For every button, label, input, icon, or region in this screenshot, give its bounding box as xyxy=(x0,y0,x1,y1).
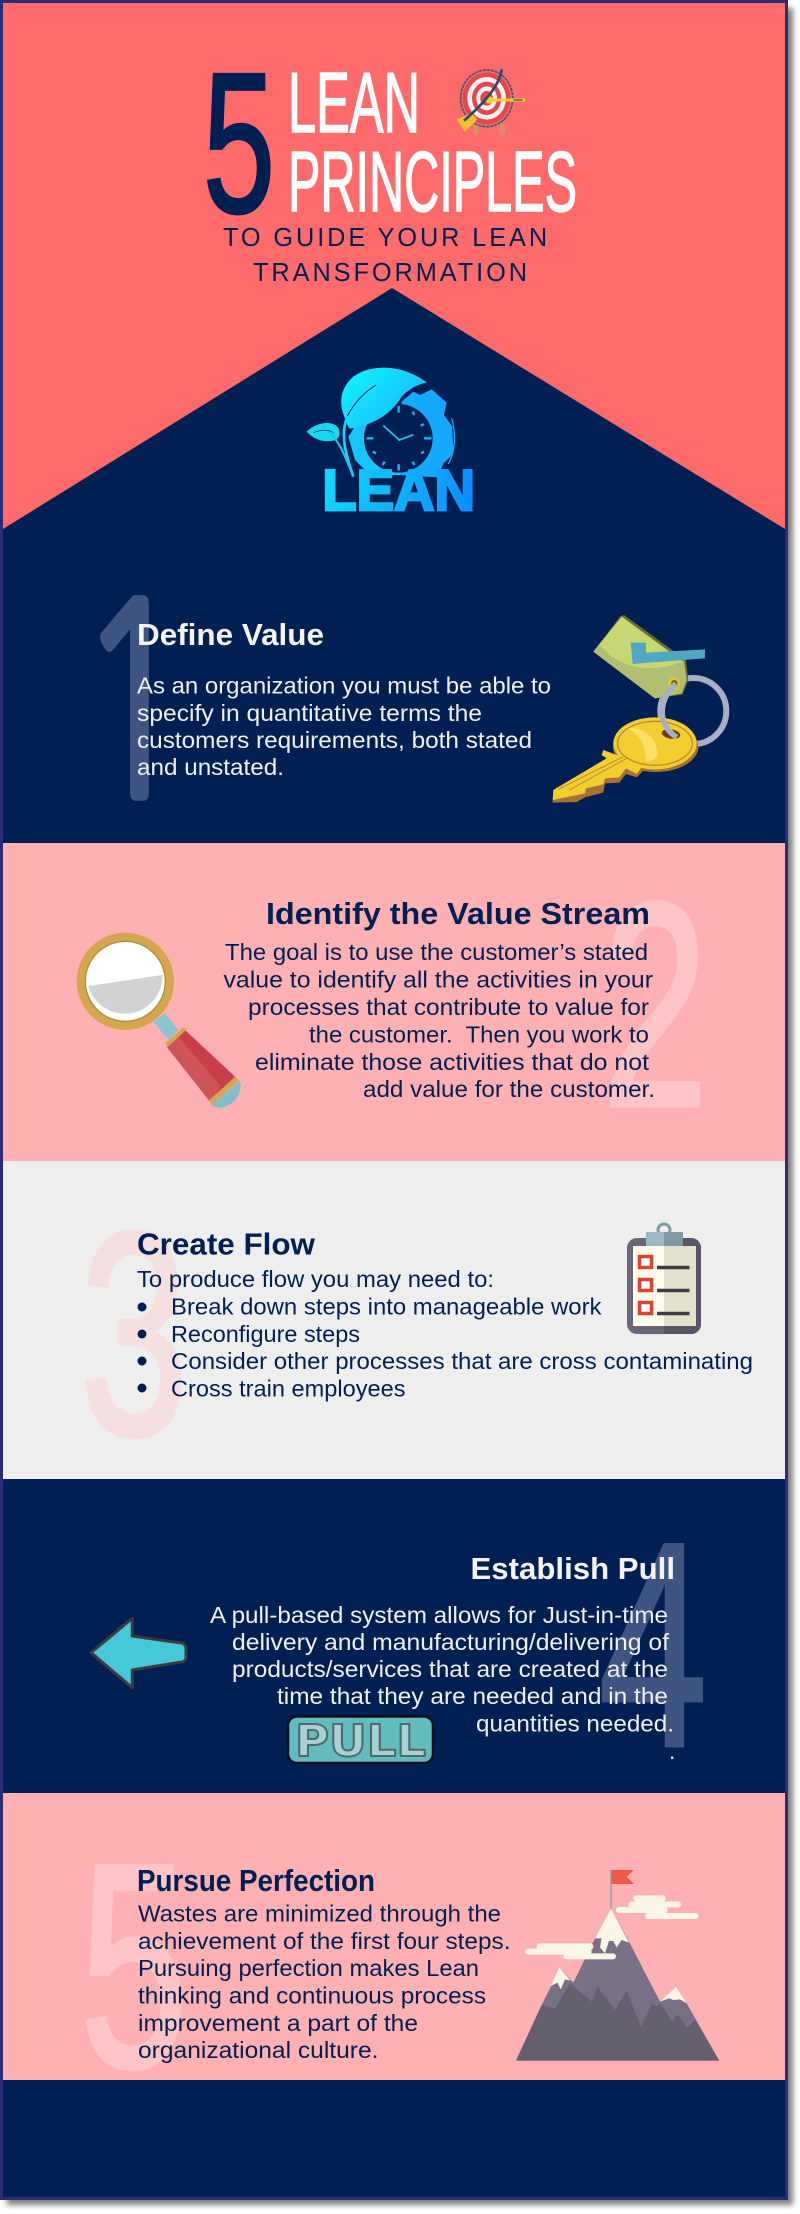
number 3: 3 xyxy=(80,1172,188,1496)
body text: organizational culture. xyxy=(138,2037,378,2063)
body text: customers requirements, both stated xyxy=(137,727,532,753)
icon: lean logo: LEAN xyxy=(322,459,475,523)
panel: footer band xyxy=(3,2080,785,2197)
panel: step 1 define value xyxy=(3,560,785,843)
body text: . xyxy=(669,1738,675,1764)
body text: thinking and continuous process xyxy=(138,1982,486,2008)
body text: A pull-based system allows for Just-in-time xyxy=(210,1602,668,1628)
body text: and unstated. xyxy=(137,754,284,780)
subtitle: TO GUIDE YOUR LEAN xyxy=(223,222,550,252)
bullet list xyxy=(138,1294,753,1402)
number 5: 5 xyxy=(80,1804,188,2128)
icon: mountain with flag and clouds xyxy=(516,1870,719,2061)
subtitle: TRANSFORMATION xyxy=(253,257,530,287)
intro text: To produce flow you may need to: xyxy=(137,1266,494,1292)
body text: time that they are needed and in the xyxy=(277,1683,668,1709)
body text: Pursuing perfection makes Lean xyxy=(138,1955,479,1981)
icon: target with bow and arrow xyxy=(457,69,525,135)
panel: header xyxy=(3,3,785,560)
body text: improvement a part of the xyxy=(138,2010,418,2036)
icon: clipboard checklist xyxy=(627,1224,701,1334)
panel: step 2 identify the value stream xyxy=(3,843,785,1167)
body text: The goal is to use the customer’s stated xyxy=(225,939,648,965)
body text: processes that contribute to value for xyxy=(248,994,649,1020)
heading: Define Value xyxy=(137,617,324,652)
panel: step 3 create flow xyxy=(3,1161,785,1496)
number 1: 1 xyxy=(76,570,191,835)
big number 5: 5 xyxy=(203,32,275,255)
icon: magnifying glass xyxy=(77,933,241,1108)
body text xyxy=(224,939,655,1102)
body text xyxy=(138,1900,510,2063)
body text: products/services that are created at the xyxy=(232,1656,668,1682)
icon: keys with tag xyxy=(553,615,726,803)
body text: the customer. Then you work to xyxy=(309,1022,649,1048)
body text: delivery and manufacturing/delivering of xyxy=(232,1629,670,1655)
heading: Pursue Perfection xyxy=(137,1863,375,1898)
panel: step 5 pursue perfection xyxy=(3,1793,785,2128)
body text: As an organization you must be able to xyxy=(137,672,551,698)
bullet list: Cross train employees xyxy=(171,1376,406,1402)
bullet list: Break down steps into manageable work xyxy=(171,1294,602,1320)
heading: Create Flow xyxy=(137,1226,316,1262)
body text: add value for the customer. xyxy=(363,1076,655,1102)
number 2: 2 xyxy=(602,843,708,1167)
heading: Identify the Value Stream xyxy=(266,896,650,931)
subtitle xyxy=(223,222,550,287)
icon: lean logo xyxy=(307,368,475,523)
icon: left arrow xyxy=(91,1618,186,1688)
panel: step 4 establish pull xyxy=(3,1479,785,1807)
body text: Wastes are minimized through the xyxy=(138,1900,501,1926)
title: LEAN: LEAN xyxy=(288,56,420,151)
heading: Establish Pull xyxy=(470,1551,675,1586)
title: PRINCIPLES: PRINCIPLES xyxy=(288,135,577,230)
body text xyxy=(137,672,551,780)
body text xyxy=(210,1602,675,1764)
body text: eliminate those activities that do not xyxy=(255,1049,650,1075)
number 4: 4 xyxy=(599,1483,707,1807)
body text: value to identify all the activities in your xyxy=(224,966,653,992)
body text: specify in quantitative terms the xyxy=(137,700,482,726)
body text: quantities needed. xyxy=(476,1710,674,1736)
bullet list: Reconfigure steps xyxy=(171,1321,360,1347)
body text: achievement of the first four steps. xyxy=(138,1928,510,1954)
badge: pull: PULL xyxy=(295,1716,426,1767)
bullet list: Consider other processes that are cross contaminating xyxy=(171,1348,753,1374)
